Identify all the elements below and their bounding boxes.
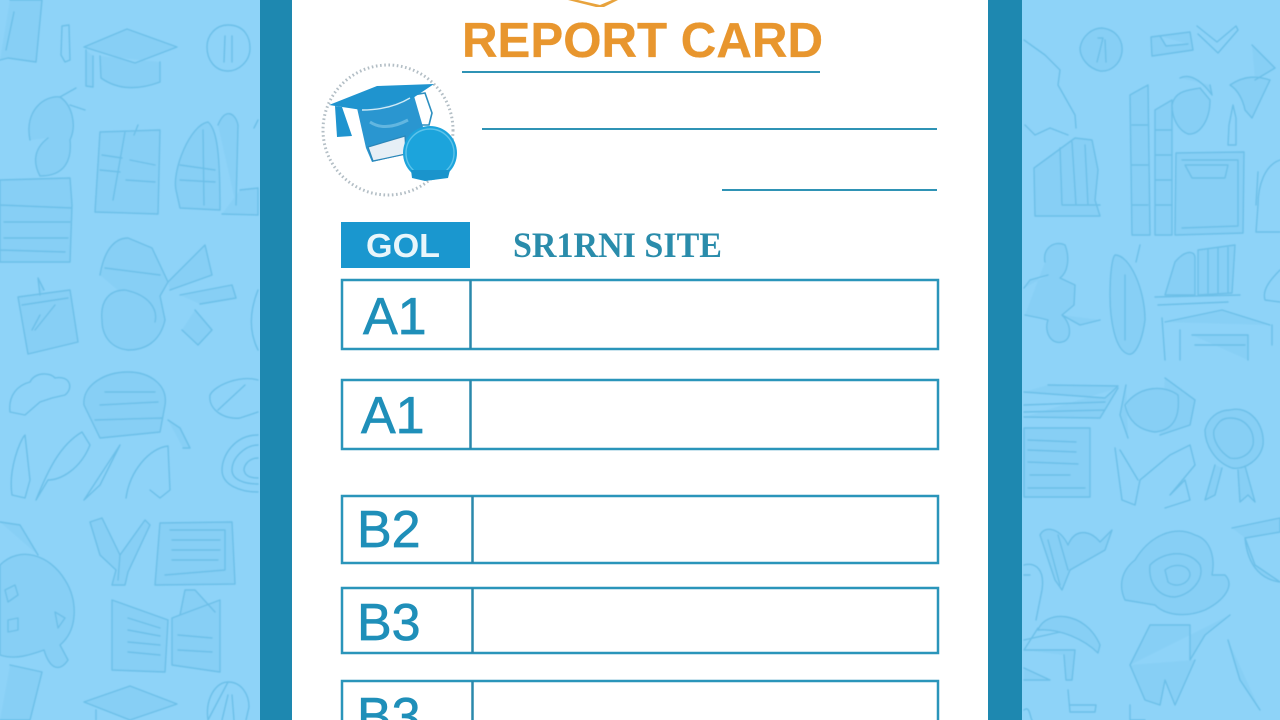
grade: A1 xyxy=(363,288,427,346)
doodle: pencils and feathers xyxy=(11,432,170,500)
doodle: partial pieces near spine xyxy=(210,120,258,418)
right spine xyxy=(988,0,1022,720)
doodle: backpack xyxy=(175,114,258,215)
globe base xyxy=(411,170,450,181)
doodle: small pencil xyxy=(1228,105,1236,145)
globe highlight xyxy=(406,129,454,177)
cap body xyxy=(357,96,423,162)
row divider xyxy=(471,681,474,720)
doodle: notebook and pencils xyxy=(112,590,220,672)
doodle: lower medal xyxy=(207,682,249,720)
doodle: statue figure xyxy=(1130,615,1260,710)
doodle: bird xyxy=(1230,45,1275,118)
row divider xyxy=(469,380,472,449)
panel: report card sheet xyxy=(292,0,988,720)
doodle: medal xyxy=(207,25,250,71)
left spine xyxy=(260,0,292,720)
doodle: partial lower-left items xyxy=(1024,564,1145,720)
doodle: school bag and supplies xyxy=(100,238,236,350)
doodle: right cap face xyxy=(1232,518,1280,582)
doodle: torn paper edge xyxy=(1024,40,1076,135)
doodle: medal right xyxy=(1080,28,1122,71)
doodle: typewriter xyxy=(84,372,190,448)
row box xyxy=(342,496,938,563)
date line xyxy=(722,189,937,191)
doodle: torn paper xyxy=(0,0,42,62)
doodle: apple basket xyxy=(1172,76,1212,134)
doodle: concentric target xyxy=(222,435,258,492)
doodle: open book xyxy=(95,125,160,214)
doodle: oval mirror xyxy=(1110,245,1145,354)
row box xyxy=(342,681,938,720)
doodle: check mark xyxy=(1197,26,1238,53)
doodle: right edge partial xyxy=(1264,270,1280,302)
row box xyxy=(342,280,938,349)
row divider xyxy=(469,280,472,349)
grade: B3 xyxy=(357,594,421,652)
back page xyxy=(413,93,432,125)
header: grade label xyxy=(341,222,470,268)
brim highlight xyxy=(362,98,410,110)
panel: left doodle pattern xyxy=(0,0,258,720)
doodle: diploma book xyxy=(90,518,150,585)
panel: right doodle pattern xyxy=(1024,26,1280,720)
doodle: cap on desk xyxy=(1162,310,1272,360)
doodle: framed board xyxy=(1175,152,1244,235)
title: REPORT CARD xyxy=(462,14,823,68)
doodle: apple and globe xyxy=(29,88,85,176)
doodle: pencil xyxy=(61,25,70,62)
doodle: backpack right xyxy=(1034,138,1100,216)
row divider xyxy=(471,588,474,653)
row box xyxy=(342,380,938,449)
cap shine xyxy=(370,120,408,127)
doodle: stacked desk lines xyxy=(0,178,72,262)
star fragment xyxy=(568,0,618,7)
grade: A1 xyxy=(361,387,425,445)
book page xyxy=(368,136,406,161)
cap brim xyxy=(329,84,434,110)
row: A1 second xyxy=(342,380,938,449)
doodle: tall tower of books xyxy=(1130,85,1172,235)
row divider xyxy=(471,496,474,563)
doodle: lower graduation cap xyxy=(84,686,177,720)
doodle: report document xyxy=(1024,428,1090,497)
doodle: seated person xyxy=(1024,244,1100,342)
doodle: cup right xyxy=(1256,160,1280,232)
header: subject label: SR1RNI SITE xyxy=(513,225,722,265)
row: B3 xyxy=(342,588,938,653)
tassel xyxy=(335,106,352,137)
row box xyxy=(342,588,938,653)
doodle: graduation cap xyxy=(84,29,177,88)
doodle: stacked lines xyxy=(1024,385,1118,418)
crystal globe xyxy=(403,126,457,180)
grade: B2 xyxy=(357,501,421,559)
grade label box xyxy=(341,222,470,268)
row: A1 xyxy=(342,280,938,349)
doodle: shelf of books xyxy=(1155,245,1240,305)
doodle: magnifier orb xyxy=(1120,378,1195,438)
icon: graduation cap badge xyxy=(323,65,457,195)
doodle: quill xyxy=(1115,445,1195,508)
doodle: mushroom desk xyxy=(1024,616,1100,680)
doodle: rosette badge xyxy=(1205,409,1263,502)
name line xyxy=(482,128,937,130)
doodle: open book with lines xyxy=(155,522,235,585)
doodle: eraser xyxy=(1151,32,1193,56)
row: B3 second xyxy=(342,681,938,720)
grade label text: GOL xyxy=(366,227,440,264)
title underline xyxy=(462,71,820,73)
doodle: cloud xyxy=(10,374,70,415)
doodle: heart book xyxy=(1040,529,1112,590)
doodle: round face xyxy=(0,522,74,720)
dotted ring xyxy=(323,65,453,195)
row: B2 xyxy=(342,496,938,563)
doodle: clipboard with check xyxy=(18,278,78,354)
doodle: swirl rose xyxy=(1122,531,1229,615)
